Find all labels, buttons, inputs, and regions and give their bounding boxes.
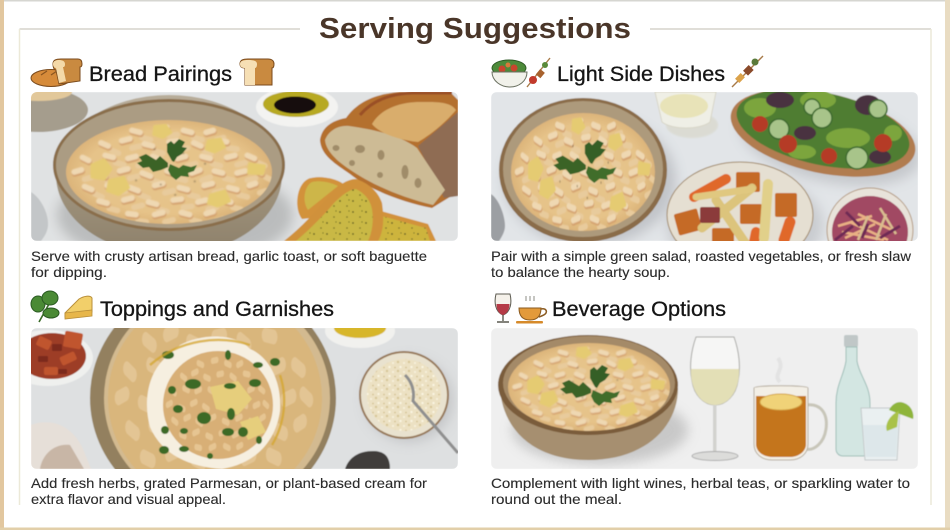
small bowl	[31, 92, 88, 132]
icon: wine glass	[495, 294, 511, 322]
slaw bowl	[826, 187, 914, 241]
panel: beverage options	[491, 294, 918, 507]
image: soup with breads	[31, 92, 458, 241]
oil and balsamic dish	[256, 92, 338, 127]
soup bowl	[499, 98, 676, 246]
tea mug	[754, 358, 826, 460]
description: toppings: extra flavor and visual appeal.	[31, 491, 226, 507]
heading: beverage options: Beverage Options	[552, 298, 726, 321]
heading: toppings and garnishes: Toppings and Garnishes	[100, 298, 334, 321]
image: soup with drinks	[491, 328, 918, 469]
soup bowl	[498, 335, 688, 464]
cloth	[31, 422, 91, 469]
panel: light side dishes	[491, 56, 928, 280]
description: bread: Serve with crusty artisan bread, garlic toast, or soft baguette	[31, 248, 427, 264]
garlic toast	[284, 177, 436, 241]
icon: skewer	[527, 58, 550, 87]
wine glass	[691, 337, 739, 460]
bacon bowl	[31, 330, 93, 386]
image: garnished soup	[31, 328, 458, 469]
panel: toppings and garnishes	[30, 290, 458, 507]
panel: bread pairings	[0, 59, 458, 280]
image: soup with sides	[491, 92, 918, 241]
description: bread	[31, 248, 427, 280]
description: beverages: round out the meal.	[491, 491, 622, 507]
water bottle	[836, 335, 870, 456]
glass	[655, 92, 718, 138]
description: sides	[491, 248, 912, 280]
heading: light side dishes: Light Side Dishes	[557, 63, 725, 86]
description: bread: for dipping.	[31, 264, 107, 280]
spoon	[491, 194, 505, 241]
icon: parsley	[31, 291, 59, 322]
soup bowl with cream	[90, 328, 336, 469]
description: toppings: Add fresh herbs, grated Parmesan, or plant-based cream for	[31, 475, 427, 491]
rustic loaf	[320, 92, 458, 208]
description: sides: Pair with a simple green salad, roasted vegetables, or fresh slaw	[491, 248, 912, 264]
icon: cheese	[65, 296, 92, 319]
olive oil dish	[325, 328, 395, 348]
description: toppings	[31, 475, 427, 507]
description: beverages: Complement with light wines, herbal teas, or sparkling water to	[491, 475, 910, 491]
roasted vegetables plate	[665, 161, 826, 241]
title: Serving Suggestions	[319, 13, 631, 45]
spoon	[345, 451, 390, 469]
soup bowl	[52, 94, 297, 241]
salad platter	[730, 92, 918, 189]
icon: skewer	[732, 56, 763, 87]
icon: tea cup	[516, 296, 546, 324]
tumbler with lime	[861, 402, 913, 460]
description: sides: to balance the hearty soup.	[491, 264, 670, 280]
description: beverages	[491, 475, 910, 507]
parmesan bowl	[360, 352, 458, 453]
heading: bread pairings: Bread Pairings	[89, 63, 232, 86]
spoon	[31, 192, 48, 241]
icon: salad bowl	[492, 60, 527, 87]
icon: bread loaves	[31, 59, 82, 86]
icon: bread slice	[240, 59, 274, 85]
